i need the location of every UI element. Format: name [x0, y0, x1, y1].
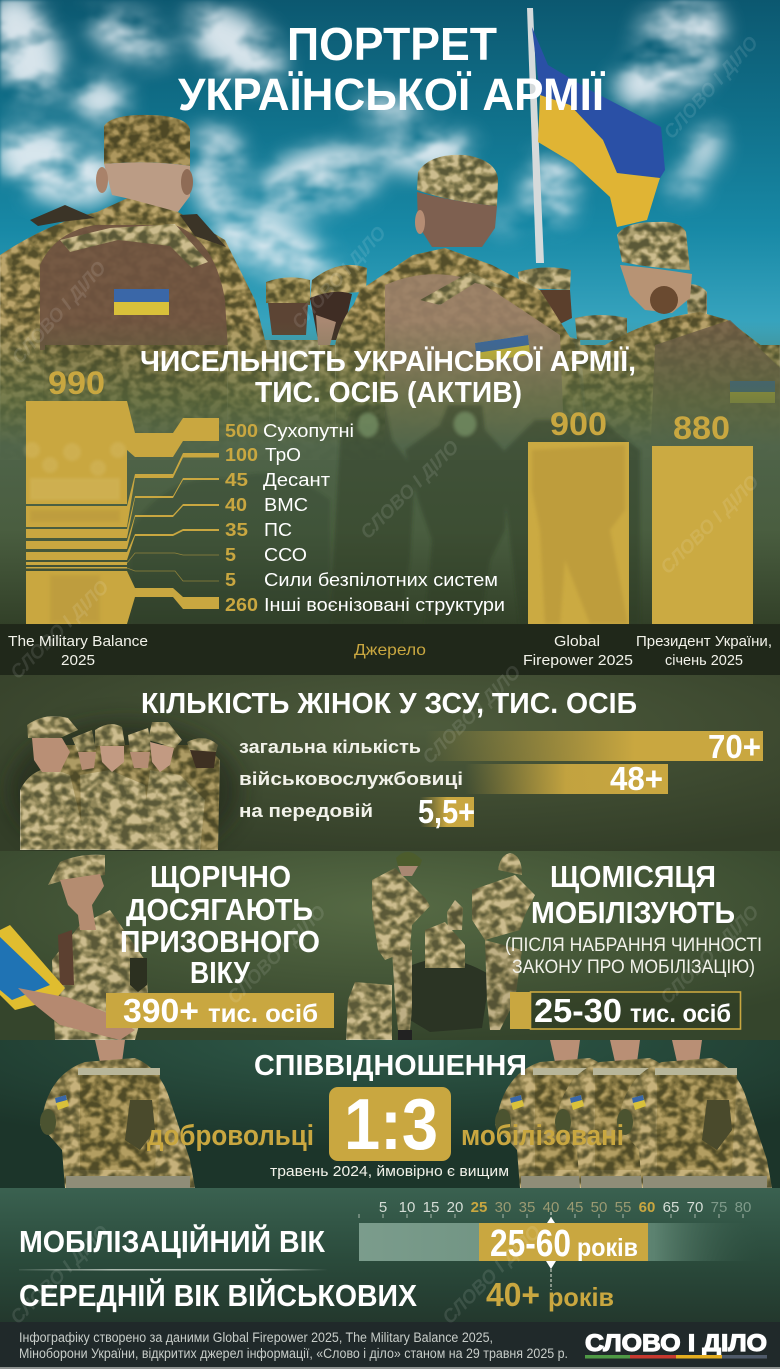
heading: army size: ЧИСЕЛЬНІСТЬ УКРАЇНСЬКОЇ АРМІЇ,	[140, 345, 636, 378]
chart labels: branches of service: Інші воєнізовані структури	[264, 594, 505, 615]
age scale: 45	[567, 1199, 583, 1216]
marching soldiers behind the chart	[130, 405, 640, 625]
bar: total women 70+: 70+	[708, 728, 761, 765]
value: 40+ years	[486, 1276, 614, 1313]
title	[178, 18, 606, 120]
chart labels: branches of service: ПС	[264, 519, 292, 540]
chart labels: branches of service: ВМС	[264, 494, 308, 515]
flag of Ukraine on a pole	[527, 8, 665, 263]
bar: Global Firepower 900	[528, 406, 629, 624]
watermarks: СЛОВО І ДІЛО	[7, 577, 114, 684]
logo: Слово і діло: СЛОВО І ДІЛО	[585, 1330, 767, 1357]
callout: 25-30 thousand: 25-30	[534, 992, 622, 1029]
text: reach draft age	[120, 859, 320, 990]
photo: two soldiers with gear	[346, 852, 535, 1040]
age scale: 80	[735, 1199, 751, 1216]
age scale: 70	[687, 1199, 703, 1216]
source band	[0, 624, 780, 675]
age scale: 50	[591, 1199, 607, 1216]
photo: volunteer soldier	[40, 1040, 195, 1188]
age bar: 25-60 years	[359, 1223, 763, 1265]
heading: ratio: СПІВВІДНОШЕННЯ	[254, 1050, 527, 1082]
source band: Джерело	[354, 642, 426, 659]
age scale: 5	[379, 1199, 387, 1216]
heading: army size: ТИС. ОСІБ (АКТИВ)	[255, 377, 522, 409]
chart labels: branches of service: 5	[225, 569, 236, 590]
photo: soldier with a book	[0, 855, 148, 1040]
chart labels: branches of service: 40	[225, 494, 247, 515]
label: mobilisation age: МОБІЛІЗАЦІЙНИЙ ВІК	[19, 1223, 325, 1259]
bar: frontline 5.5+: на передовій	[239, 801, 373, 821]
chart labels: branches of service: 45	[225, 469, 248, 490]
panel: ages	[0, 1188, 780, 1322]
source note: Інфографіку створено за даними Global Firepower 2025, The Military Balance 2025,	[19, 1330, 493, 1345]
panel: annual draft age and monthly mobilisation	[0, 851, 780, 1040]
chart labels: branches of service: Сили безпілотних систем	[264, 569, 498, 590]
age scale: 15	[423, 1199, 439, 1216]
source band: The Military Balance	[8, 633, 148, 650]
bar: Global Firepower 900: 900	[550, 406, 607, 442]
bar: servicewomen 48+	[239, 760, 668, 797]
background: sky with clouds	[0, 0, 780, 460]
age scale	[359, 1199, 751, 1218]
watermarks: СЛОВО І ДІЛО	[657, 472, 764, 579]
bar: servicewomen 48+: 48+	[610, 760, 663, 797]
sankey chart: Military Balance 990	[24, 365, 219, 624]
chart labels: branches of service: Сухопутні	[263, 420, 354, 441]
photos: mobilised soldiers	[495, 1040, 772, 1188]
text: monthly mobilisation: МОБІЛІЗУЮТЬ	[531, 895, 735, 930]
bar: servicewomen 48+: військовослужбовиці	[239, 769, 463, 789]
source band: січень 2025	[665, 652, 743, 669]
age scale: 55	[615, 1199, 631, 1216]
text: monthly mobilisation: ЗАКОНУ ПРО МОБІЛІЗАЦІЮ)	[512, 957, 755, 978]
chart labels: branches of service: 35	[225, 519, 248, 540]
chart labels: branches of service: 100	[225, 444, 258, 465]
age scale: 65	[663, 1199, 679, 1216]
panel: volunteers to mobilised ratio	[0, 1040, 780, 1188]
title: УКРАЇНСЬКОЇ АРМІЇ	[178, 69, 606, 120]
callout: 390+ thousand: 390+	[123, 992, 199, 1029]
age scale: 35	[519, 1199, 535, 1216]
text: monthly mobilisation: (ПІСЛЯ НАБРАННЯ ЧИННОСТІ	[505, 935, 762, 956]
bar: President of Ukraine 880: 880	[673, 410, 730, 446]
age bar: 25-60 years: років	[577, 1234, 638, 1262]
callout: 25-30 thousand	[510, 992, 740, 1029]
source band: Global	[554, 633, 600, 650]
source note: Міноборони України, відкритих джерел інформації, «Слово і діло» станом на 29 травня 2025 р.	[19, 1346, 568, 1361]
bar: total women 70+: загальна кількість	[239, 737, 421, 757]
source band: Firepower 2025	[523, 652, 633, 669]
fade into olive chart background	[0, 305, 780, 625]
text: monthly mobilisation	[505, 859, 762, 978]
age bar: 25-60 years: 25-60	[490, 1223, 571, 1265]
chart labels: branches of service	[225, 420, 505, 615]
bar: frontline 5.5+: 5,5+	[418, 793, 475, 830]
label: mobilised: мобілізовані	[461, 1120, 624, 1152]
text: monthly mobilisation: ЩОМІСЯЦЯ	[550, 859, 716, 894]
label: volunteers: добровольці	[147, 1120, 314, 1152]
callout: 1:3: 1:3	[344, 1085, 438, 1165]
photo: women soldiers	[20, 716, 220, 850]
bar: frontline 5.5+	[239, 793, 475, 830]
age scale: 20	[447, 1199, 463, 1216]
note: May 2024: травень 2024, ймовірно є вищим	[270, 1163, 509, 1180]
text: reach draft age: ПРИЗОВНОГО	[120, 924, 320, 959]
chart labels: branches of service: ТрО	[265, 444, 301, 465]
value: 40+ years: років	[548, 1282, 614, 1312]
watermarks: СЛОВО І ДІЛО	[419, 662, 526, 769]
source note	[19, 1330, 568, 1361]
age scale: 25	[471, 1199, 487, 1216]
bar: President of Ukraine 880	[652, 410, 753, 624]
text: reach draft age: ДОСЯГАЮТЬ	[126, 892, 313, 927]
text: reach draft age: ЩОРІЧНО	[150, 859, 291, 894]
heading: women: КІЛЬКІСТЬ ЖІНОК У ЗСУ, ТИС. ОСІБ	[141, 688, 637, 720]
watermarks: СЛОВО І ДІЛО	[357, 437, 464, 544]
sankey chart: Military Balance 990: 990	[48, 365, 105, 401]
source band: Президент України,	[636, 633, 772, 650]
age scale: 60	[639, 1199, 655, 1216]
heading: army size	[140, 345, 636, 409]
callout: 390+ thousand	[106, 992, 334, 1029]
value: 40+ years: 40+	[486, 1276, 540, 1313]
chart labels: branches of service: 260	[225, 594, 258, 615]
watermarks: СЛОВО І ДІЛО	[657, 902, 764, 1009]
text: reach draft age: ВІКУ	[190, 955, 251, 990]
watermarks: СЛОВО І ДІЛО	[288, 223, 391, 333]
chart labels: branches of service: Десант	[263, 469, 331, 490]
callout: 25-30 thousand: тис. осіб	[630, 1000, 731, 1028]
watermarks: СЛОВО І ДІЛО	[7, 1222, 114, 1329]
chart labels: branches of service: 500	[225, 420, 258, 441]
watermarks: СЛОВО І ДІЛО	[8, 258, 111, 368]
age scale: 75	[711, 1199, 727, 1216]
label: average age of servicemen: СЕРЕДНІЙ ВІК ВІЙСЬКОВИХ	[19, 1277, 417, 1313]
age scale: 30	[495, 1199, 511, 1216]
source band: 2025	[61, 652, 95, 669]
panel: women in the armed forces	[0, 675, 780, 860]
chart labels: branches of service: 5	[225, 544, 236, 565]
bar: total women 70+	[239, 728, 763, 765]
soldiers seen from behind	[0, 115, 780, 460]
watermarks: СЛОВО І ДІЛО	[660, 33, 763, 143]
marker: average age	[546, 1212, 556, 1290]
footer	[0, 1322, 780, 1369]
age scale: 10	[399, 1199, 415, 1216]
callout: 390+ thousand: тис. осіб	[208, 1000, 318, 1028]
watermarks: СЛОВО І ДІЛО	[224, 902, 331, 1009]
watermarks: СЛОВО І ДІЛО	[439, 1222, 546, 1329]
title: ПОРТРЕТ	[287, 18, 497, 70]
age scale: 40	[543, 1199, 559, 1216]
chart labels: branches of service: ССО	[264, 544, 307, 565]
